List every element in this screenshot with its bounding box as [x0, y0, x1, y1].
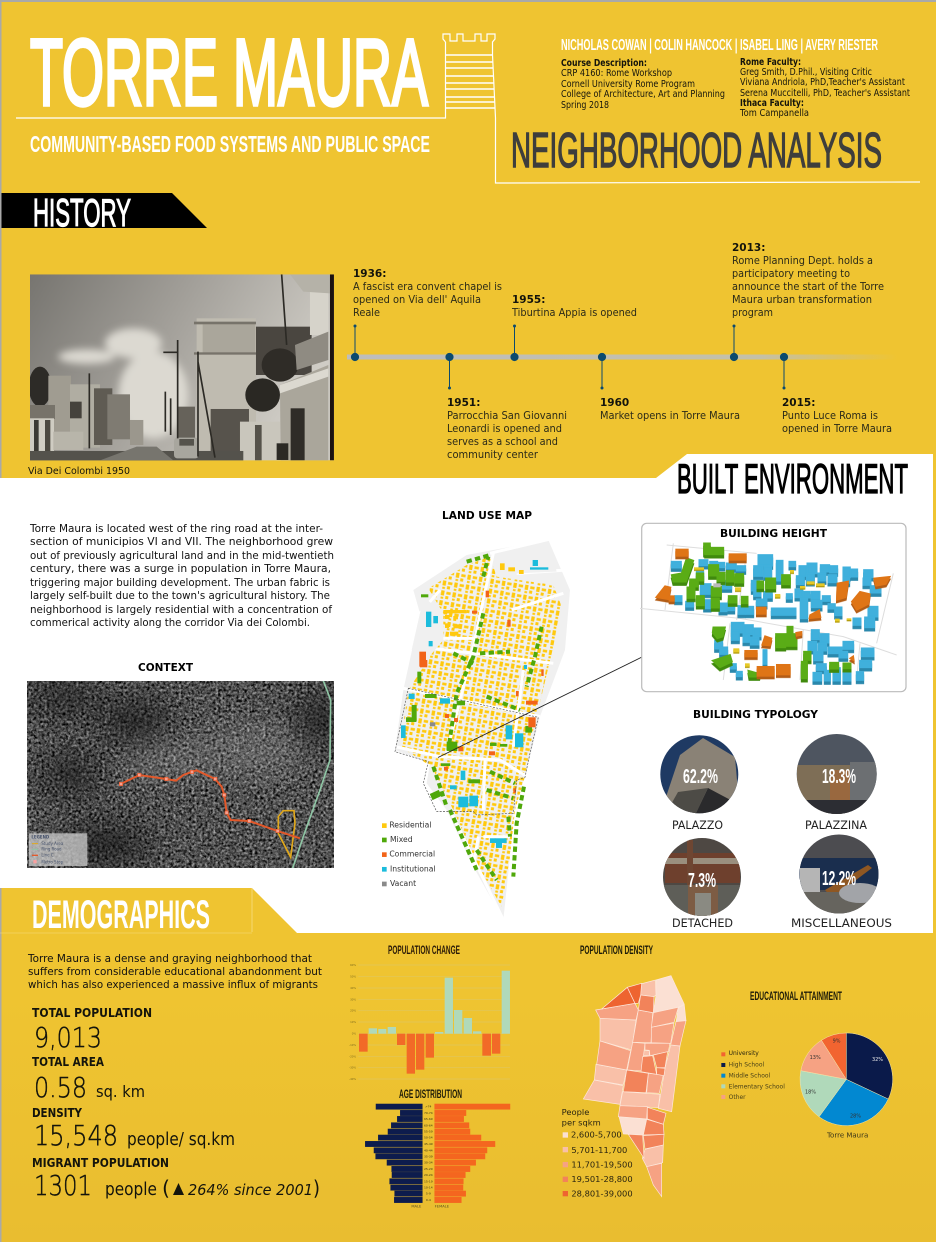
stat: total area: [32, 1055, 145, 1104]
chart: population change: 50%: [350, 975, 356, 979]
chart: age distribution: 60-64: [424, 1123, 433, 1127]
heading: context: CONTEXT: [138, 661, 193, 674]
density legend: 28,801-39,000: [571, 1188, 633, 1198]
density legend: 19,501-28,800: [571, 1174, 633, 1184]
chart: age distribution: 25-29: [424, 1167, 433, 1171]
chart: age distribution: 40-44: [424, 1148, 433, 1152]
heading: building typology: BUILDING TYPOLOGY: [693, 708, 819, 721]
faculty list: Viviana Andriola, PhD,Teacher's Assistant: [740, 77, 905, 88]
chart: age distribution: >74: [425, 1105, 432, 1109]
faculty list: Ithaca Faculty:: [740, 98, 804, 109]
faculty list: Tom Campanella: [739, 108, 809, 119]
course description: College of Architecture, Art and Planning: [561, 89, 725, 100]
timeline event: 1936: opened on Via dell' Aquila: [353, 294, 481, 306]
timeline event: 1960: 1960: [600, 397, 629, 409]
timeline event: 1955: [511, 294, 637, 319]
commercial buildings: [419, 591, 544, 793]
map legend: Metro Stop: [41, 859, 64, 864]
icon: tower outline: [16, 34, 920, 183]
course description: [561, 58, 725, 111]
timeline: [347, 242, 897, 461]
demographics paragraph: suffers from considerable educational abandonment but: [28, 966, 322, 978]
heading: demographics: DEMOGRAPHICS: [32, 893, 210, 937]
map legend: [29, 833, 87, 866]
mixed use buildings: [433, 555, 542, 880]
chart: age distribution: 45-49: [424, 1142, 433, 1146]
chart: population change: 30%: [350, 997, 356, 1001]
map legend: Ring Road: [41, 847, 62, 852]
map legend: Study Area: [41, 841, 64, 846]
stat: total population: TOTAL POPULATION: [32, 1006, 152, 1020]
chart: population change: 60%: [350, 963, 356, 967]
demographics paragraph: [27, 953, 322, 991]
chart: age distribution: 30-34: [424, 1161, 433, 1165]
timeline event: 1936: 1936:: [353, 268, 386, 280]
pie chart: [800, 1033, 893, 1126]
timeline event: 1936: [353, 268, 502, 319]
stat: migrant population: people: [105, 1179, 157, 1200]
timeline event: 2013: 2013:: [732, 242, 765, 254]
timeline event: 2013: Rome Planning Dept. holds a: [732, 255, 873, 267]
stat: density: DENSITY: [32, 1106, 82, 1120]
intro paragraph: triggering major building development. The urban fabric is: [30, 577, 330, 589]
course description: CRP 4160: Rome Workshop: [561, 68, 672, 79]
chart: age distribution: 10-14: [424, 1186, 433, 1190]
chart: age distribution: 70-74: [424, 1111, 433, 1115]
chart: age distribution: 55-59: [424, 1130, 433, 1134]
panel: building height: [640, 523, 906, 692]
chart: age distribution: 35-39: [424, 1154, 433, 1158]
timeline event: 2013: [732, 242, 884, 319]
intro paragraph: section of municipios VI and VII. The neighborhood grew: [30, 536, 333, 548]
ring road: [293, 681, 331, 868]
title: TORRE MAURA: [30, 20, 428, 126]
density legend: People: [562, 1107, 589, 1117]
pie legend: University: [729, 1050, 759, 1057]
heading: educational attainment: EDUCATIONAL ATTAINMENT: [750, 991, 842, 1003]
stat: density: 15,548: [34, 1119, 118, 1152]
chart: population change: [349, 945, 510, 1081]
chart: educational attainment: 18%: [805, 1090, 816, 1096]
stat: migrant population: 264% since 2001: [188, 1181, 313, 1199]
timeline event: 1951: community center: [447, 449, 539, 461]
land use legend: Mixed: [390, 835, 413, 844]
chart: population change: -40%: [349, 1077, 356, 1081]
land use legend: [382, 820, 436, 888]
stat: migrant population: ): [313, 1176, 320, 1200]
faculty list: Rome Faculty:: [740, 57, 801, 68]
callout line to building height: [438, 657, 642, 758]
intro paragraph: neighborhood is largely residential with a concentration of: [30, 604, 332, 616]
stat: migrant population: MIGRANT POPULATION: [32, 1156, 169, 1170]
chart: age distribution: [365, 1089, 510, 1208]
palazzina percentage: 18.3%: [822, 766, 856, 788]
stat: total area: 0.58: [34, 1071, 87, 1104]
chart: educational attainment: 32%: [872, 1057, 883, 1063]
palazzina label: PALAZZINA: [805, 818, 867, 832]
chart: educational attainment: 9%: [833, 1038, 841, 1044]
miscellaneous label: MISCELLANEOUS: [791, 916, 892, 930]
chart: population change: 0%: [352, 1032, 356, 1036]
timeline event: 2015: [782, 397, 892, 435]
chart: age distribution: 20-24: [424, 1173, 433, 1177]
demographics paragraph: Torre Maura is a dense and graying neighborhood that: [27, 953, 312, 965]
land use map: [382, 538, 570, 923]
heading: building height: BUILDING HEIGHT: [720, 527, 827, 540]
building height 3D model: [640, 543, 897, 681]
typology: miscellaneous: [791, 832, 892, 930]
chart: population change: 40%: [350, 986, 356, 990]
heading: population change: POPULATION CHANGE: [388, 945, 460, 957]
stat: migrant population: [32, 1156, 320, 1202]
pie caption: Torre Maura: [826, 1132, 868, 1140]
stat: migrant population: (: [162, 1176, 170, 1200]
intro paragraph: largely self-built due to the town's agricultural history. The: [30, 590, 330, 602]
timeline event: 1951: Leonardi is opened and: [447, 423, 562, 435]
stat: migrant population: 1301: [34, 1169, 92, 1202]
chart: population change: 20%: [350, 1009, 356, 1013]
metro stops: [119, 770, 279, 833]
intro paragraph: out of previously agricultural land and in the mid-twentieth: [30, 550, 334, 562]
chart: age distribution: MALE: [411, 1204, 422, 1208]
chart: age distribution: 15-19: [424, 1179, 433, 1183]
vacant building: [430, 722, 435, 726]
miscellaneous percentage: 12.2%: [822, 868, 856, 890]
panel: built environment background: [0, 454, 933, 933]
land use legend: Vacant: [390, 879, 416, 888]
course description: Spring 2018: [561, 100, 609, 111]
stat: density: people/ sq.km: [127, 1129, 235, 1150]
timeline event: 2015: 2015:: [782, 397, 815, 409]
subtitle: COMMUNITY-BASED FOOD SYSTEMS AND PUBLIC SPACE: [30, 131, 430, 157]
chart: age distribution: 50-54: [424, 1136, 433, 1140]
density legend: [562, 1107, 633, 1198]
metro line C: [121, 770, 300, 838]
palazzo percentage: 62.2%: [683, 766, 718, 788]
timeline event: 2015: opened in Torre Maura: [782, 423, 892, 435]
photo caption: Via Dei Colombi 1950: [28, 466, 130, 477]
detached label: DETACHED: [672, 916, 733, 930]
context map: [27, 681, 345, 868]
photo: Via Dei Colombi 1950: [29, 274, 334, 461]
chart: educational attainment: 13%: [810, 1055, 821, 1061]
stat: total area: sq. km: [96, 1082, 145, 1101]
demographics paragraph: which has also experienced a massive influx of migrants: [28, 979, 318, 991]
typology: palazzo: [660, 735, 738, 829]
stat: density: [32, 1106, 235, 1152]
land use legend: Commercial: [389, 849, 435, 858]
course description: Cornell University Rome Program: [561, 79, 695, 90]
timeline event: 2013: participatory meeting to: [732, 268, 850, 280]
pie legend: High School: [729, 1062, 765, 1069]
timeline event: 2013: Maura urban transformation: [732, 294, 872, 306]
palazzo label: PALAZZO: [672, 818, 723, 832]
land use legend: Institutional: [390, 864, 436, 873]
typology: detached: [663, 838, 741, 927]
institutional buildings: [401, 560, 548, 848]
chart: educational attainment: [721, 991, 893, 1140]
map legend: LEGEND: [31, 835, 50, 840]
stat: total population: [32, 1006, 152, 1054]
timeline event: 1955: Tiburtina Appia is opened: [511, 307, 637, 319]
timeline event: 2013: program: [732, 307, 773, 319]
timeline event: 1951: serves as a school and: [447, 436, 558, 448]
chart: population change: -30%: [349, 1066, 356, 1070]
timeline event: 1936: Reale: [353, 307, 380, 319]
chart: age distribution: 65-69: [424, 1117, 433, 1121]
pie legend: Middle School: [729, 1073, 771, 1080]
chart: population change: -20%: [349, 1054, 356, 1058]
study area outline: [278, 811, 295, 857]
timeline event: 1951: 1951:: [447, 397, 480, 409]
stat: total area: TOTAL AREA: [32, 1055, 105, 1069]
timeline event: 1960: Market opens in Torre Maura: [600, 410, 740, 422]
timeline event: 1960: [600, 397, 740, 422]
chart: educational attainment: 28%: [850, 1114, 861, 1120]
course description: Course Description:: [561, 58, 647, 69]
chart: population change: 10%: [350, 1020, 356, 1024]
timeline event: 2013: announce the start of the Torre: [732, 281, 884, 293]
intro paragraph: commerical activity along the corridor Via dei Colombi.: [30, 617, 310, 629]
typology: palazzina: [796, 734, 877, 829]
intro paragraph: [29, 523, 334, 629]
detached percentage: 7.3%: [688, 870, 716, 892]
heading: history: HISTORY: [33, 192, 131, 235]
pie legend: [721, 1050, 785, 1101]
faculty list: Greg Smith, D.Phil., Visiting Critic: [740, 67, 872, 78]
timeline event: 1951: [447, 397, 567, 461]
chart: age distribution: 5-9: [426, 1192, 431, 1196]
chart: age distribution: FEMALE: [435, 1204, 450, 1208]
pie legend: Elementary School: [729, 1083, 785, 1090]
intro paragraph: Torre Maura is located west of the ring road at the inter-: [29, 523, 323, 535]
chart: age distribution: 0-4: [426, 1198, 431, 1202]
density legend: 2,600-5,700: [571, 1130, 622, 1140]
chart: population change: -10%: [349, 1043, 356, 1047]
heading: population density: POPULATION DENSITY: [580, 945, 653, 957]
heading: land use map: LAND USE MAP: [442, 509, 532, 522]
heading: age distribution: AGE DISTRIBUTION: [399, 1089, 462, 1101]
map legend: Line C: [41, 853, 54, 858]
timeline event: 1936: A fascist era convent chapel is: [353, 281, 502, 293]
stat: total population: 9,013: [34, 1021, 102, 1054]
intro paragraph: century, there was a surge in population in Torre Maura,: [30, 563, 331, 575]
density legend: 5,701-11,700: [571, 1145, 627, 1155]
pie legend: Other: [729, 1094, 746, 1101]
timeline event: 2015: Punto Luce Roma is: [782, 410, 878, 422]
timeline event: 1955: 1955:: [512, 294, 545, 306]
density legend: per sqkm: [562, 1118, 601, 1128]
land use legend: Residential: [389, 820, 432, 829]
faculty list: [739, 57, 910, 119]
density legend: 11,701-19,500: [571, 1159, 633, 1169]
chart: population density map: [562, 945, 686, 1198]
study area boundary: [395, 688, 538, 815]
timeline event: 1951: Parrocchia San Giovanni: [447, 410, 567, 422]
